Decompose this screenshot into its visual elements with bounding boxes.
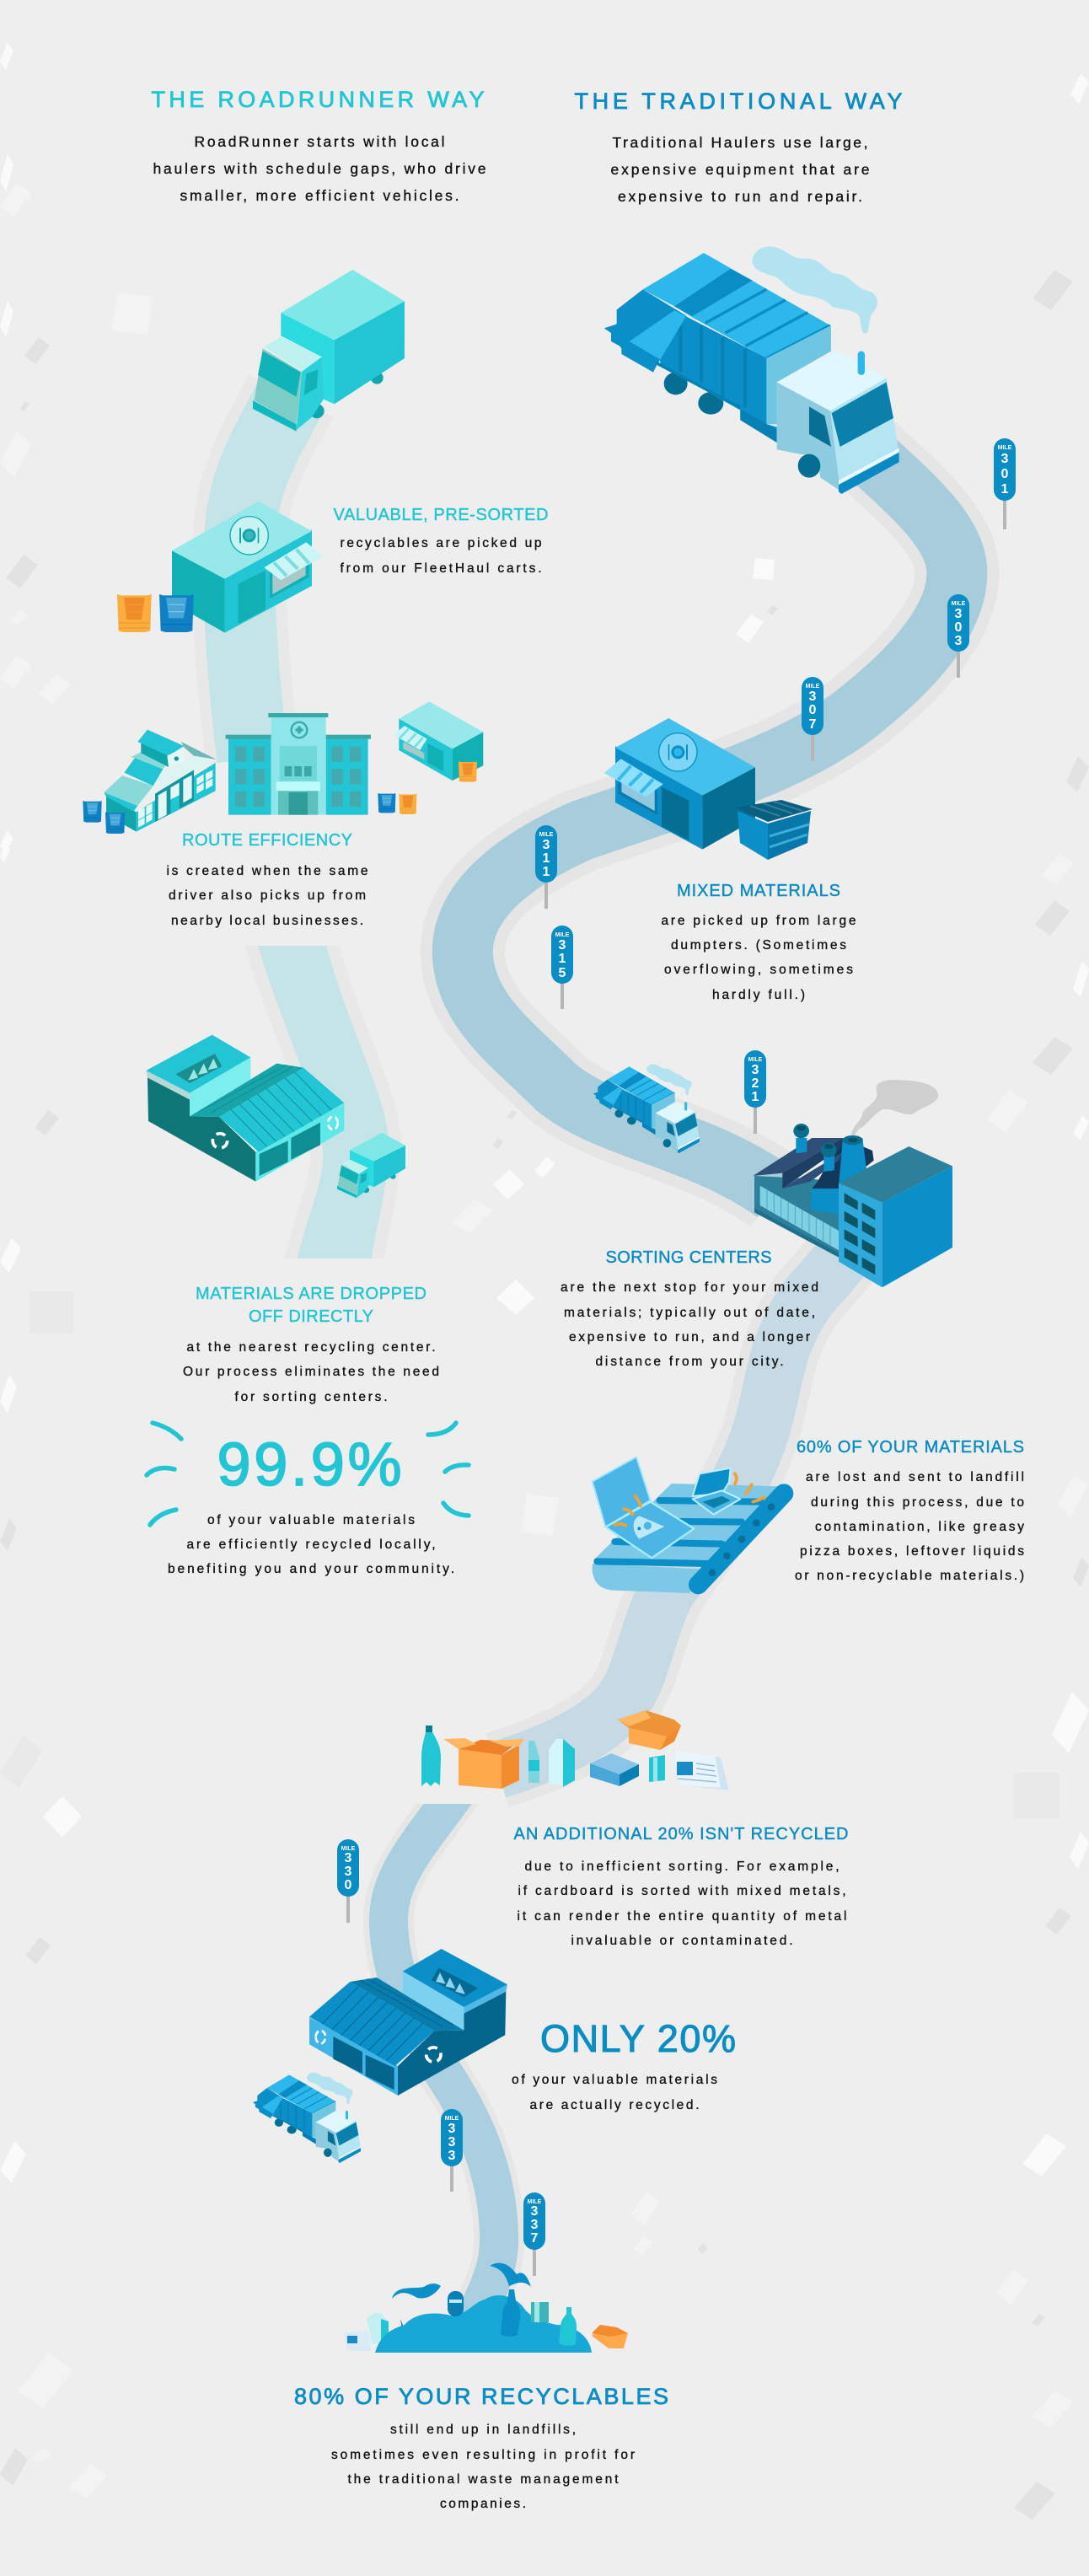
heading: materials are dropped off directly: OFF DIRECTLY [249,1307,373,1326]
mile marker 301: 3 [1001,452,1009,466]
text: additional 20% description: it can render the entire quantity of metal [518,1909,846,1924]
heading: materials are dropped off directly: MATERIALS ARE DROPPED [196,1285,426,1303]
text: additional 20% description: due to inefficient sorting. For example, [524,1860,840,1874]
text: mixed materials description [661,914,856,1002]
text: mixed materials description: dumpters. (Sometimes [671,938,846,953]
illustration: blue restaurant [604,718,755,850]
mile marker 303: 3 [955,634,963,648]
mile marker 330 [337,1839,359,1923]
mile marker 321: MILE [748,1057,763,1063]
stat: only 20%: ONLY 20% [540,2017,736,2060]
mile marker 330: 3 [345,1865,352,1879]
illustration: landfill mound [344,2289,628,2353]
text: additional 20% description [518,1860,846,1948]
heading: route efficiency: ROUTE EFFICIENCY [182,831,352,850]
illustration: blue recycling center [309,1949,507,2096]
illustration: mini traditional truck on road [593,1064,700,1153]
stat: 99.9%: 99.9% [217,1431,401,1499]
mile marker 315: 3 [559,938,566,953]
heading: additional 20%: AN ADDITIONAL 20% ISN'T RECYCLED [514,1825,848,1843]
mile marker 301: 0 [1001,467,1009,481]
text: 60% description: or non-recyclable materials.) [795,1569,1024,1583]
text: sorting centers description [561,1280,818,1369]
road: traditional route lower section [389,1770,499,2335]
illustration: small teal shop [394,701,483,782]
mile marker 330: MILE [341,1846,356,1852]
mile marker 315: 5 [559,966,566,980]
text: materials dropped description: for sorting centers. [234,1390,388,1404]
mile marker 333 [441,2109,463,2192]
icon: hospital carts [378,793,416,814]
heading: 60% of your materials: 60% OF YOUR MATERIALS [797,1438,1024,1457]
illustration: hospital building [226,713,371,815]
text: traditional intro [610,134,870,205]
icon: celebration ticks around stat [147,1423,469,1525]
icon: seagull left [392,2284,441,2299]
illustration: teal recycling center [146,1035,344,1182]
text: 80% description: the traditional waste management [347,2472,619,2487]
mile marker 330: 3 [345,1851,352,1865]
mile marker 303: 3 [955,607,963,621]
text: 60% description: during this process, due to [811,1495,1024,1510]
text: 99.9% description: benefiting you and your community. [168,1562,454,1576]
mile marker 315: MILE [555,932,570,938]
text: roadrunner intro: RoadRunner starts with local [194,133,445,150]
mile marker 315 [551,926,573,1009]
text: traditional intro: expensive equipment that are [610,161,870,178]
mile marker 301 [994,438,1016,529]
mile marker 303: MILE [952,601,966,607]
text: materials dropped description: at the nearest recycling center. [187,1340,435,1355]
mile marker 337: 3 [531,2204,539,2219]
mile marker 307: MILE [806,684,820,690]
text: sorting centers description: distance from your city. [595,1355,784,1369]
mile marker 307: 3 [809,690,817,704]
illustration: traditional garbage truck [604,246,899,494]
text: roadrunner intro: haulers with schedule gaps, who drive [153,160,485,177]
text: traditional intro: expensive to run and repair. [618,188,862,205]
mile marker 311: 1 [543,851,550,866]
text: sorting centers description: are the next stop for your mixed [561,1280,818,1295]
heading: valuable pre-sorted: VALUABLE, PRE-SORTED [334,506,548,524]
text: 60% description: contamination, like greasy [815,1520,1024,1534]
heading: mixed materials: MIXED MATERIALS [677,882,840,900]
mile marker 337: 3 [531,2218,539,2232]
illustration: conveyor belt with pizza box [593,1457,784,1593]
road: traditional route faded middle section [497,1214,877,1770]
text: sorting centers description: materials; typically out of date, [564,1306,815,1320]
icon: school blue carts [83,801,125,834]
text: traditional intro: Traditional Haulers use large, [612,134,868,151]
heading: 80% of your recyclables: 80% OF YOUR RECYCLABLES [294,2384,668,2409]
mile marker 307 [802,677,823,761]
mile marker 303: 0 [955,620,963,635]
mile marker 333: 3 [448,2122,456,2136]
mile marker 337 [523,2192,545,2276]
text: mixed materials description: hardly full.) [712,988,805,1002]
mile marker 333: 3 [448,2135,456,2149]
mile marker 337: 7 [531,2231,539,2246]
text: roadrunner intro [153,133,485,204]
illustration: teal restaurant [172,502,323,633]
text: materials dropped description: Our process eliminates the need [183,1365,439,1379]
text: only 20% description: of your valuable materials [512,2073,717,2087]
mile marker 321: 2 [752,1076,759,1091]
text: 60% description: are lost and sent to landfill [806,1470,1024,1484]
mile marker 307: 7 [809,717,817,732]
text: sorting centers description: expensive to run, and a longer [569,1330,810,1344]
mile marker 301: 1 [1001,482,1009,496]
icon: seagull right [490,2263,531,2287]
illustration: blue dumpster [736,800,813,860]
text: 80% description: still end up in landfills, [390,2423,576,2437]
text: 99.9% description: of your valuable materials [207,1513,415,1527]
text: 60% description [795,1470,1024,1583]
illustration: mini teal truck [337,1133,405,1198]
text: materials dropped description [183,1340,439,1404]
icon: orange recycling cart [117,594,152,632]
heading: materials are dropped off directly [196,1285,426,1326]
mile marker 321: 3 [752,1063,759,1077]
text: roadrunner intro: smaller, more efficient vehicles. [180,187,459,204]
illustration: school building [104,730,217,832]
mile marker 315: 1 [559,952,566,966]
text: only 20% description: are actually recycled. [529,2098,700,2112]
mile marker 333: 3 [448,2149,456,2163]
text: route efficiency description: is created when the same [167,864,367,878]
illustration: sorting center factory [753,1080,952,1287]
road: roadrunner route upper section [239,396,291,759]
heading: the traditional way: THE TRADITIONAL WAY [575,89,902,114]
mile marker 333: MILE [445,2116,459,2122]
mile marker 311: 3 [543,838,550,852]
text: 60% description: pizza boxes, leftover liquids [800,1544,1024,1559]
text: mixed materials description: overflowing, sometimes [664,963,853,977]
illustration: mini traditional truck near center [253,2073,361,2163]
heading: the roadrunner way: THE ROADRUNNER WAY [152,87,484,112]
mile marker 321 [744,1050,766,1134]
text: additional 20% description: if cardboard is sorted with mixed metals, [518,1884,846,1898]
text: 80% description: companies. [440,2497,526,2511]
mile marker 301: MILE [998,445,1012,451]
mile marker 311: MILE [539,832,554,838]
text: only 20% description [512,2073,717,2112]
text: mixed materials description: are picked up from large [661,914,856,928]
text: 80% description [331,2423,635,2511]
text: valuable pre-sorted description: recyclables are picked up [341,536,541,550]
text: route efficiency description: driver also picks up from [169,888,366,903]
mile marker 311: 1 [543,865,550,879]
text: route efficiency description [167,864,367,928]
mile marker 321: 1 [752,1090,759,1104]
mile marker 311 [535,825,557,909]
text: 99.9% description [168,1513,454,1576]
illustration: recyclables pile [421,1710,729,1790]
text: route efficiency description: nearby local businesses. [171,914,363,928]
mile marker 337: MILE [528,2199,542,2205]
mile marker 303 [947,594,969,678]
mile marker 330: 0 [345,1878,352,1892]
road: traditional route upper section [463,438,957,1193]
text: valuable pre-sorted description [341,536,541,576]
illustration: roadrunner small truck [253,270,405,432]
mile marker 307: 0 [809,703,817,717]
text: 80% description: sometimes even resulting in profit for [331,2448,635,2462]
text: 99.9% description: are efficiently recycled locally, [187,1538,435,1552]
text: valuable pre-sorted description: from our FleetHaul carts. [341,561,541,576]
road: roadrunner route lower section [258,946,389,1258]
heading: sorting centers: SORTING CENTERS [605,1248,772,1267]
text: additional 20% description: invaluable or contaminated. [571,1934,792,1948]
icon: blue recycling cart [159,594,194,632]
